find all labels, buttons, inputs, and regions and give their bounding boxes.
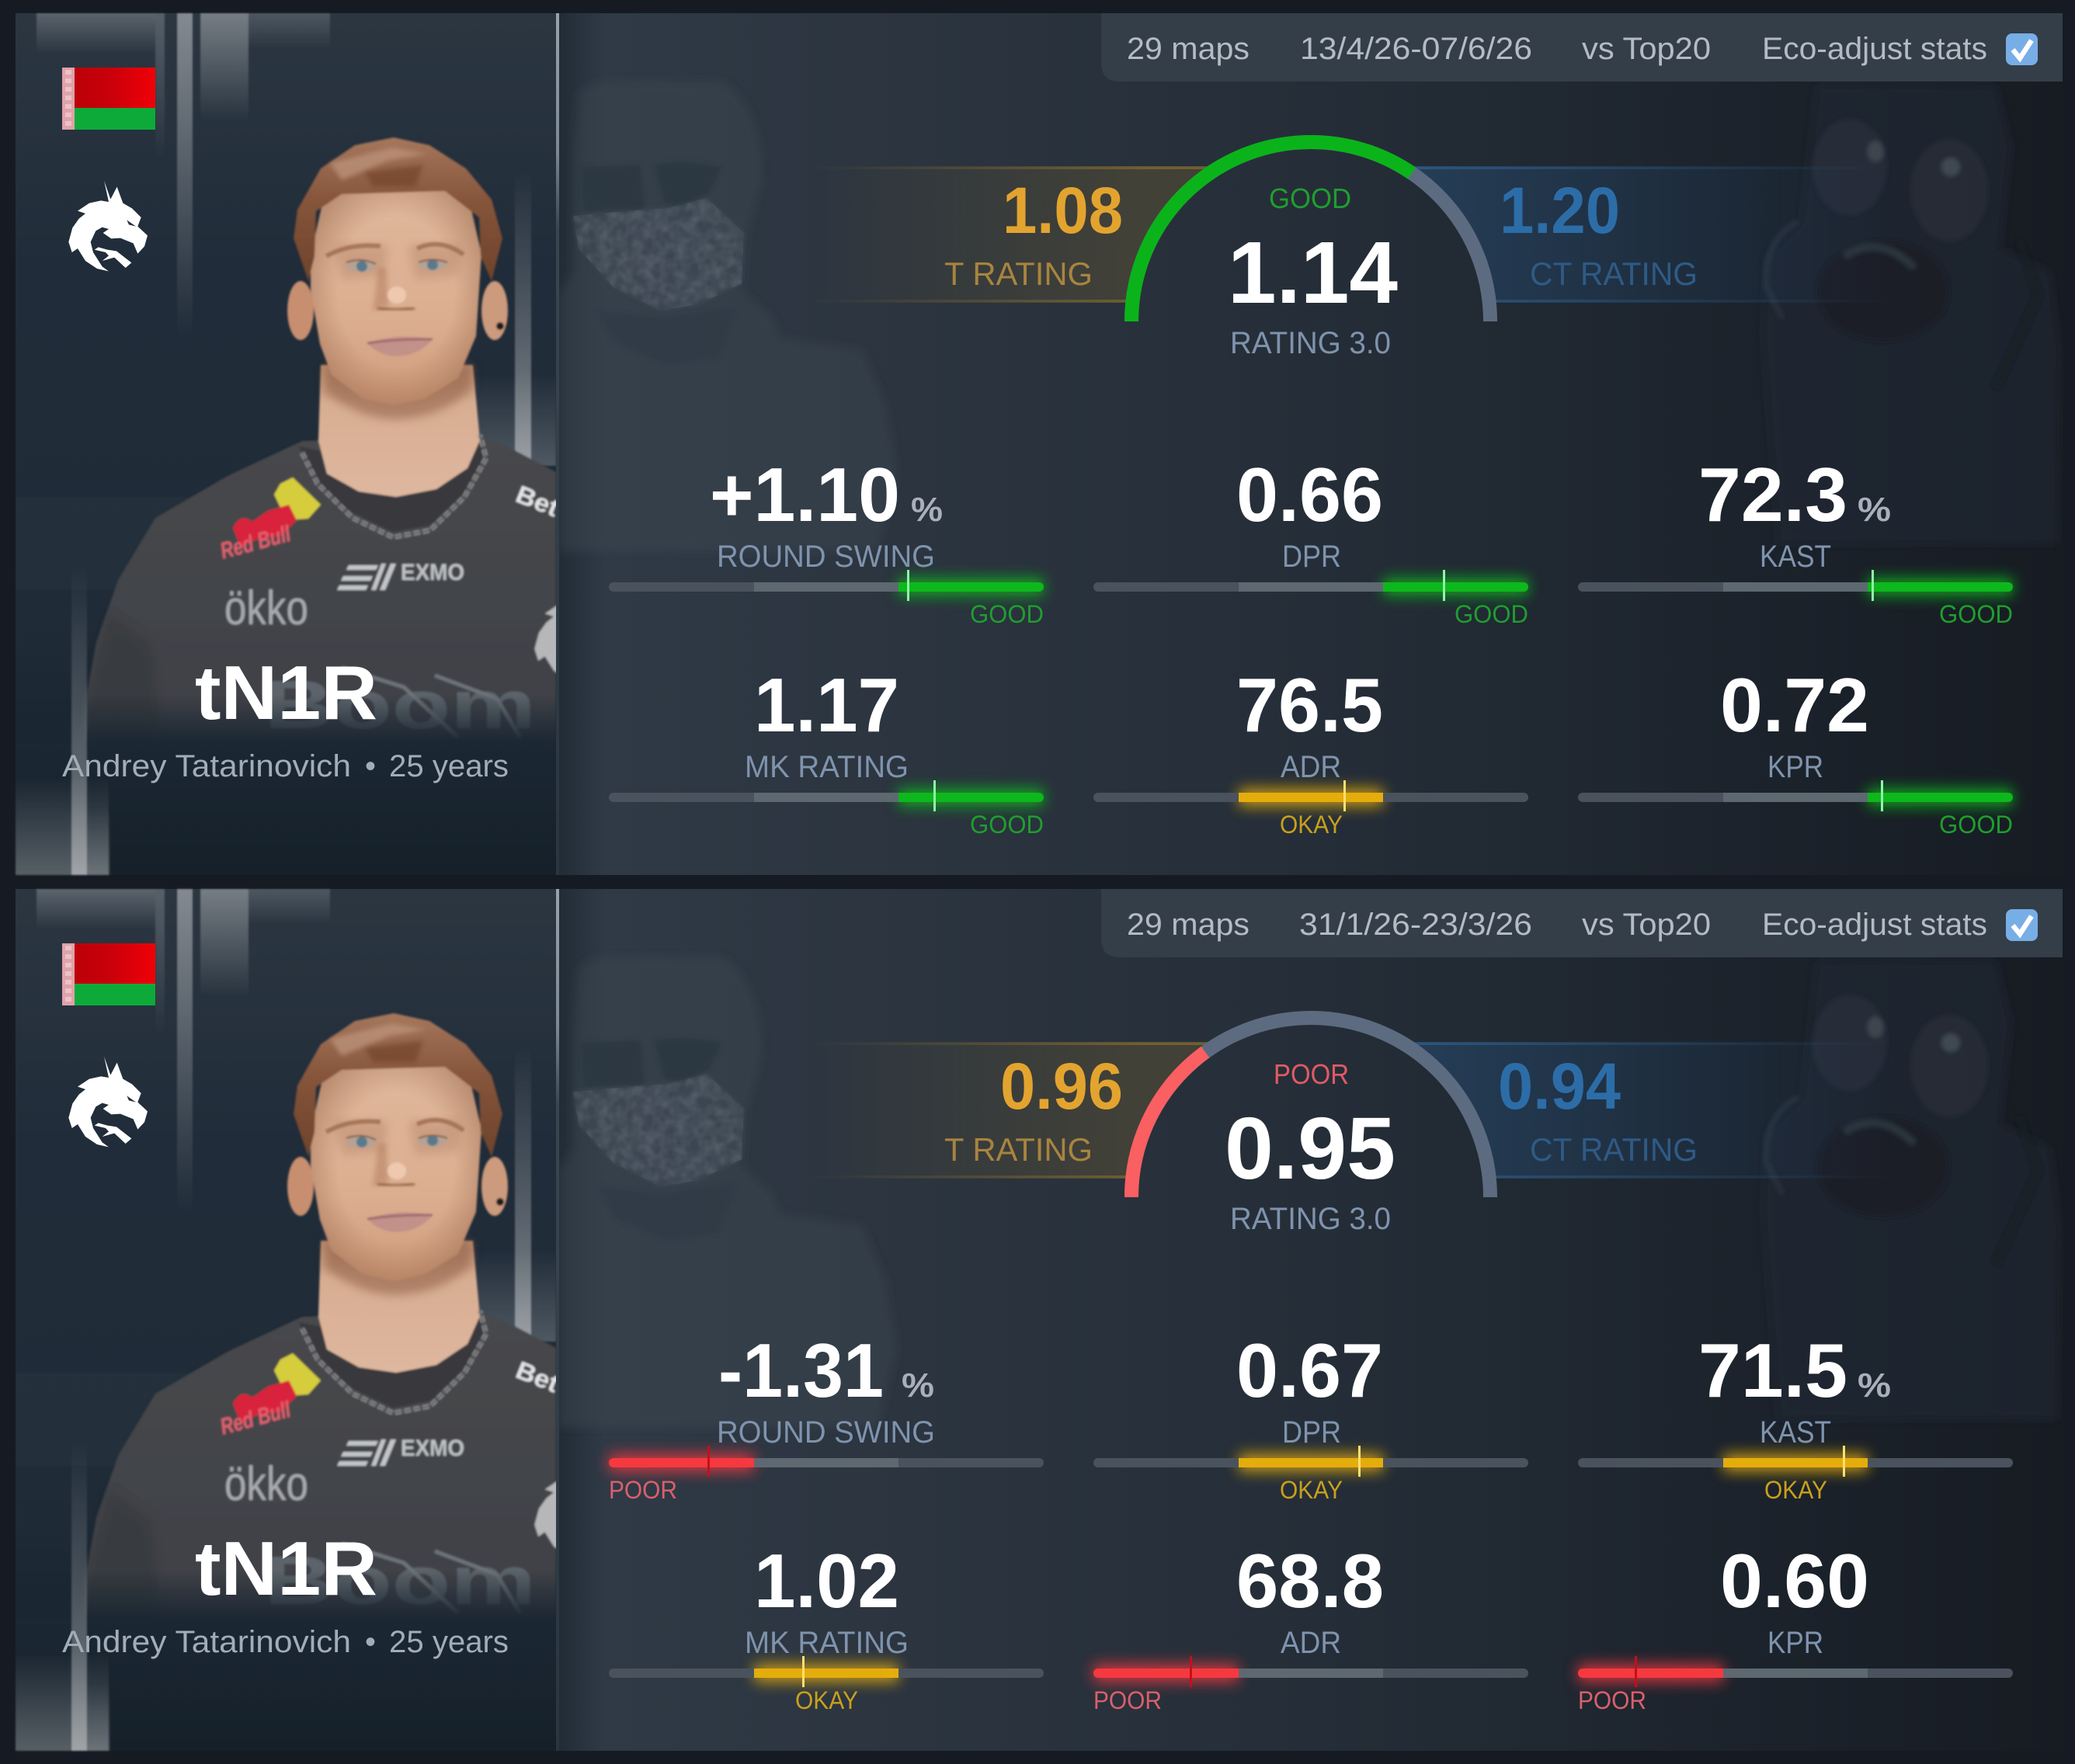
stat: KAST — [1578, 452, 2013, 628]
T rating band — [808, 1042, 1222, 1179]
header filter bar: 13/4/26-07/6/26 — [1300, 32, 1532, 66]
stat: MK rating: MK RATING — [745, 750, 909, 784]
CT rating band — [1400, 1042, 1895, 1179]
stat: MK rating — [609, 662, 1044, 839]
stat: DPR — [1093, 1328, 1528, 1504]
player name and age — [62, 1625, 509, 1659]
card divider — [556, 13, 559, 875]
stat: DPR: DPR — [1282, 540, 1341, 574]
player name and age: Andrey Tatarinovich — [62, 749, 351, 783]
stat: ADR: ADR — [1281, 1626, 1341, 1660]
header filter bar — [1101, 889, 2063, 957]
stat: KPR: POOR — [1578, 1686, 1646, 1714]
icon: team logo — [68, 181, 148, 271]
rating gauge — [1131, 1018, 1490, 1236]
CT rating band: CT RATING — [1530, 1131, 1698, 1168]
card divider — [556, 889, 559, 1751]
stat: round swing: % — [911, 491, 943, 529]
player name and age: • — [365, 1625, 376, 1659]
stat: round swing: ROUND SWING — [717, 1415, 935, 1450]
stat: KPR — [1578, 662, 2013, 839]
stat: MK rating: 1.17 — [754, 662, 899, 748]
stat: ADR: OKAY — [1280, 811, 1343, 839]
stat: KPR: 0.60 — [1720, 1538, 1869, 1623]
player portrait — [82, 1013, 624, 1652]
stat: round swing: -1.31 — [718, 1328, 884, 1413]
stat: KAST — [1578, 1328, 2013, 1504]
player name and age: Andrey Tatarinovich — [62, 1625, 351, 1659]
player name and age: 25 years — [389, 749, 509, 783]
stat: MK rating: GOOD — [970, 811, 1044, 839]
stat: DPR: 0.67 — [1236, 1328, 1383, 1413]
stat: KAST: 72.3 — [1698, 452, 1847, 537]
icon: team logo — [68, 1057, 148, 1147]
stat: round swing: POOR — [609, 1476, 677, 1504]
CT rating band: 0.94 — [1498, 1050, 1621, 1123]
stat: MK rating — [609, 1538, 1044, 1714]
background silhouette: gas mask operator — [1763, 85, 2059, 543]
player portrait — [82, 137, 624, 776]
stat: DPR: 0.66 — [1236, 452, 1383, 537]
stat: DPR — [1093, 452, 1528, 628]
stat: KPR: 0.72 — [1720, 662, 1869, 748]
header filter bar: 31/1/26-23/3/26 — [1299, 908, 1532, 942]
background silhouette: masked operator — [559, 82, 897, 551]
stat: ADR: 68.8 — [1236, 1538, 1384, 1623]
icon: checkbox — [2006, 909, 2038, 941]
player card background — [16, 13, 556, 875]
rating gauge: 0.95 — [1225, 1099, 1395, 1197]
stat: KPR: KPR — [1767, 750, 1823, 784]
stat: ADR: ADR — [1281, 750, 1341, 784]
background silhouette: gas mask operator — [1763, 961, 2059, 1419]
player name and age: 25 years — [389, 1625, 509, 1659]
stat: KAST: % — [1858, 1366, 1891, 1405]
header filter bar: 29 maps — [1127, 32, 1250, 66]
panel: recent period — [16, 13, 2063, 875]
rating gauge: RATING 3.0 — [1230, 1202, 1391, 1236]
stat: KAST: KAST — [1760, 1415, 1831, 1450]
stat: round swing — [609, 1328, 1044, 1504]
stat: DPR: DPR — [1282, 1415, 1341, 1450]
stat: round swing — [609, 452, 1044, 628]
header filter bar: Eco-adjust stats — [1762, 908, 1987, 942]
stat: DPR: GOOD — [1455, 600, 1528, 628]
T rating band: 1.08 — [1003, 174, 1123, 247]
stat: MK rating: 1.02 — [754, 1538, 899, 1623]
T rating band: T RATING — [944, 1131, 1093, 1168]
card lower fade — [16, 564, 556, 875]
rating gauge: 1.14 — [1228, 224, 1398, 321]
rating gauge: GOOD — [1269, 182, 1351, 214]
player card background — [16, 889, 556, 1751]
player nickname: tN1R — [195, 650, 377, 735]
stat: round swing: +1.10 — [710, 452, 900, 537]
player name and age — [62, 749, 509, 783]
stat: KPR: GOOD — [1939, 811, 2013, 839]
stat: KAST: 71.5 — [1698, 1328, 1847, 1413]
CT rating band: 1.20 — [1500, 174, 1620, 247]
icon: checkbox — [2006, 33, 2038, 65]
stat: ADR — [1093, 662, 1528, 839]
header filter bar: vs Top20 — [1582, 32, 1711, 66]
stat: round swing: GOOD — [970, 600, 1044, 628]
T rating band — [808, 166, 1222, 303]
rating gauge: RATING 3.0 — [1230, 326, 1391, 360]
stat: round swing: ROUND SWING — [717, 540, 935, 574]
stat: MK rating: MK RATING — [745, 1626, 909, 1660]
header filter bar — [1101, 13, 2063, 82]
stat: KPR — [1578, 1538, 2013, 1714]
card lower fade — [16, 1440, 556, 1751]
stat: KAST: OKAY — [1764, 1476, 1827, 1504]
stat: ADR: POOR — [1093, 1686, 1162, 1714]
panel background — [559, 13, 2063, 875]
stat: KAST: GOOD — [1939, 600, 2013, 628]
CT rating band: CT RATING — [1530, 255, 1698, 292]
stat: ADR — [1093, 1538, 1528, 1714]
CT rating band — [1400, 166, 1895, 303]
header filter bar: 29 maps — [1127, 908, 1250, 942]
panel: earlier period — [16, 889, 2063, 1751]
icon: Belarus flag — [62, 68, 155, 130]
T rating band: T RATING — [944, 255, 1093, 292]
stat: ADR: 76.5 — [1236, 662, 1383, 748]
player nickname: tN1R — [195, 1526, 377, 1611]
background silhouette: masked operator — [559, 957, 897, 1427]
stat: round swing: % — [902, 1366, 934, 1405]
player name and age: • — [365, 749, 376, 783]
stat: KAST: KAST — [1760, 540, 1831, 574]
stat: MK rating: OKAY — [795, 1686, 858, 1714]
stat: KAST: % — [1858, 491, 1891, 529]
rating gauge: POOR — [1274, 1058, 1349, 1090]
icon: Belarus flag — [62, 943, 155, 1005]
panel background — [559, 889, 2063, 1751]
rating gauge — [1131, 142, 1490, 360]
stat: KPR: KPR — [1767, 1626, 1823, 1660]
header filter bar: Eco-adjust stats — [1762, 32, 1987, 66]
T rating band: 0.96 — [1000, 1050, 1123, 1123]
stat: DPR: OKAY — [1280, 1476, 1343, 1504]
header filter bar: vs Top20 — [1582, 908, 1711, 942]
